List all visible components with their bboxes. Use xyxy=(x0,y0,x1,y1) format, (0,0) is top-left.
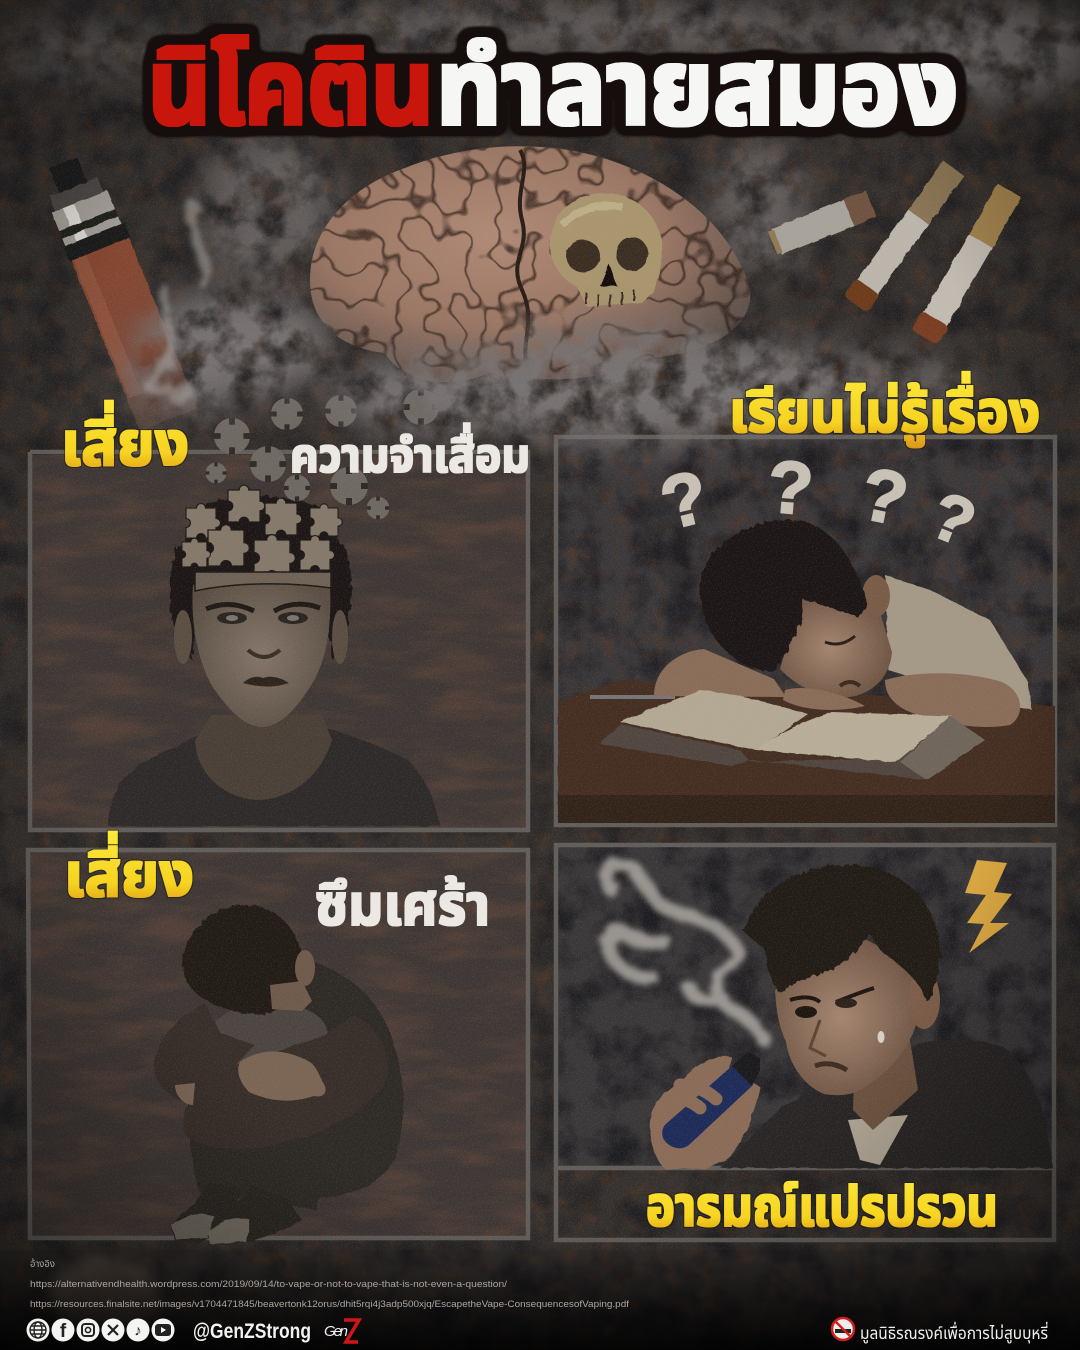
upper smoke xyxy=(0,0,1080,285)
logo: GenZ: Gen xyxy=(324,1323,348,1340)
logo: GenZ xyxy=(324,1320,359,1342)
references xyxy=(30,1259,629,1310)
icon: question marks: ? xyxy=(854,451,915,542)
vape smoke wisps xyxy=(149,205,205,392)
icon: open book xyxy=(600,690,985,780)
cigarettes top right xyxy=(768,160,1023,345)
heading: can't focus: เรียนไม่รู้เรื่อง xyxy=(729,371,1040,448)
handle: @GenZStrong xyxy=(193,1320,311,1343)
icon: puzzle pieces on head xyxy=(182,485,342,591)
social icons: f xyxy=(60,1321,67,1342)
heading: risk 1: เสี่ยง xyxy=(61,400,189,479)
icon: skull xyxy=(550,193,662,307)
heading: memory loss: ความจำเสื่อม xyxy=(290,423,530,482)
title: ทำลายสมอง xyxy=(436,29,958,147)
panel frames xyxy=(28,437,1055,1240)
social icons: ♪ xyxy=(134,1322,142,1340)
heading: risk 2: เสี่ยง xyxy=(64,831,194,910)
references: https://resources.finalsite.net/images/v1704471845/beavertonk12orus/dhit5rqi4j3adp500xjq/EscapetheVape-ConsequencesofVaping.pdf xyxy=(30,1299,629,1310)
icon: question marks: ? xyxy=(764,444,817,531)
heading: depression: ซึมเศร้า xyxy=(315,873,490,938)
title: นิโคติน xyxy=(148,29,434,147)
vape device top left xyxy=(34,150,200,432)
icon: floating puzzle pieces xyxy=(206,389,439,519)
icon: lightning bolt xyxy=(965,860,1012,953)
panel: mood swings boy xyxy=(604,860,1053,1169)
icon: smoke wisps xyxy=(604,864,761,1045)
references: https://alternativendhealth.wordpress.com/2019/09/14/to-vape-or-not-to-vape-that-is-not-even-a-question/ xyxy=(30,1279,507,1290)
icon: no smoking xyxy=(832,1318,854,1340)
brain with skull xyxy=(310,146,750,382)
foundation name: มูลนิธิรณรงค์เพื่อการไม่สูบบุหรี่ xyxy=(860,1321,1048,1345)
icon: sneakers xyxy=(172,1183,302,1245)
icon: question marks: ? xyxy=(653,454,716,545)
social icons xyxy=(26,1318,174,1342)
panel backgrounds xyxy=(30,440,1055,1238)
lower smoke xyxy=(120,290,980,445)
footer fade xyxy=(0,1240,1080,1350)
panel: memory loss boy xyxy=(108,389,440,826)
panel: can't focus boy xyxy=(558,444,1060,823)
icon: blue vape in hand xyxy=(650,1052,760,1169)
icon: question marks: ? xyxy=(921,477,986,561)
icon: question marks xyxy=(662,460,974,543)
heading: mood swings: อารมณ์แปรปรวน xyxy=(646,1175,998,1238)
title xyxy=(148,29,958,147)
references: อ้างอิง xyxy=(30,1259,55,1270)
panel: depression boy xyxy=(154,905,403,1245)
